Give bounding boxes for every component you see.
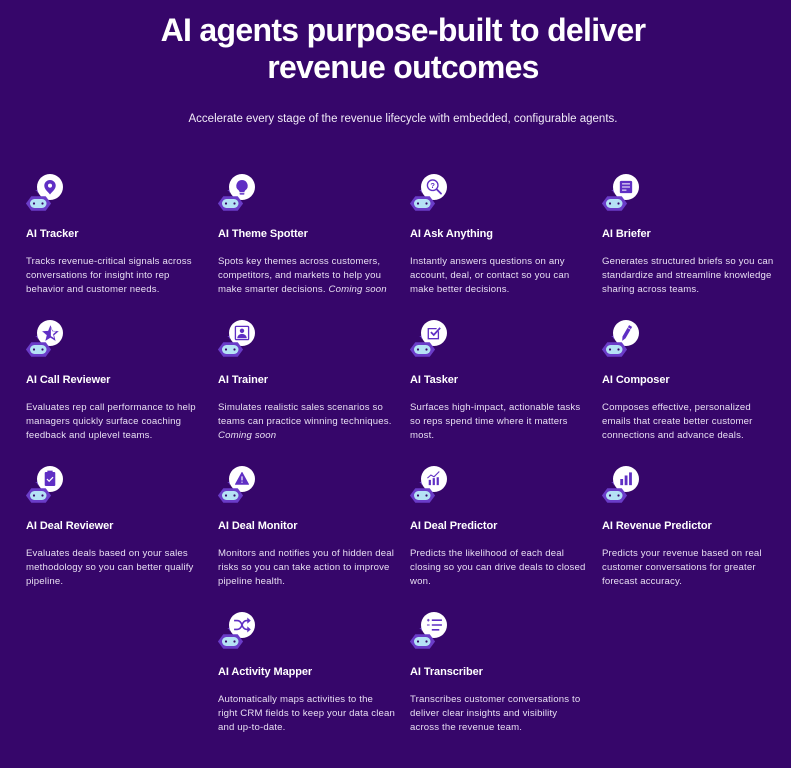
description: Instantly answers questions on any — [410, 256, 565, 267]
icon: profile card — [218, 320, 255, 357]
description: sharing across teams. — [602, 284, 699, 295]
heading: AI Trainer — [218, 374, 268, 386]
description: teams can practice winning techniques. — [218, 416, 392, 427]
description: account, deal, or contact so you can — [410, 270, 569, 281]
card: AI Deal Predictor — [410, 466, 585, 587]
card: AI Tracker — [26, 174, 192, 295]
description — [218, 694, 395, 733]
heading: AI Composer — [602, 374, 670, 386]
card: AI Call Reviewer — [26, 320, 196, 441]
description: risks so you can take action to improve — [218, 562, 390, 573]
heading: AI Deal Predictor — [410, 520, 497, 532]
description: Composes effective, personalized — [602, 402, 751, 413]
description: make smarter decisions. Coming soon — [218, 284, 387, 295]
description: competitors, and markets to help you — [218, 270, 381, 281]
description — [26, 402, 196, 441]
description: standardize and streamline knowledge — [602, 270, 772, 281]
description: pipeline health. — [218, 576, 285, 587]
title: revenue outcomes — [267, 49, 539, 85]
description: Generates structured briefs so you can — [602, 256, 773, 267]
description: deliver clear insights and visibility — [410, 708, 557, 719]
card: AI Tasker — [410, 320, 580, 441]
description: Tracks revenue-critical signals across — [26, 256, 192, 267]
description: conversations for insight into rep — [26, 270, 170, 281]
icon: light bulb — [218, 174, 255, 211]
icon: checkbox — [410, 320, 447, 357]
heading: AI Tracker — [26, 228, 78, 240]
description: Predicts the likelihood of each deal — [410, 548, 564, 559]
icon: brief document — [602, 174, 639, 211]
description: Surfaces high-impact, actionable tasks — [410, 402, 580, 413]
heading: AI Theme Spotter — [218, 228, 308, 240]
heading: AI Call Reviewer — [26, 374, 110, 386]
description: won. — [410, 576, 431, 587]
description: across the revenue team. — [410, 722, 522, 733]
card: AI Ask Anything — [410, 174, 569, 295]
title — [161, 12, 646, 85]
heading: AI Activity Mapper — [218, 666, 312, 678]
description: forecast accuracy. — [602, 576, 682, 587]
description: emails that create better customer — [602, 416, 752, 427]
icon: bar chart — [602, 466, 639, 503]
icon: clipboard check — [26, 466, 63, 503]
description: Simulates realistic sales scenarios so — [218, 402, 383, 413]
description: customer conversations for greater — [602, 562, 756, 573]
description: methodology so you can better qualify — [26, 562, 194, 573]
description: closing so you can drive deals to closed — [410, 562, 585, 573]
description: managers quickly surface coaching — [26, 416, 181, 427]
description: and up-to-date. — [218, 722, 285, 733]
description — [602, 548, 762, 587]
icon: star — [26, 320, 63, 357]
description: make better decisions. — [410, 284, 510, 295]
description: Spots key themes across customers, — [218, 256, 380, 267]
description — [218, 256, 387, 295]
description — [410, 256, 569, 295]
description — [410, 402, 580, 441]
card: AI Revenue Predictor — [602, 466, 762, 587]
description — [602, 256, 773, 295]
icon: warning triangle — [218, 466, 255, 503]
icon: bar chart with trend — [410, 466, 447, 503]
card: AI Briefer — [602, 174, 773, 295]
heading: AI Tasker — [410, 374, 458, 386]
card: AI Transcriber — [410, 604, 596, 734]
description: pipeline. — [26, 576, 63, 587]
icon: shuffle arrows — [218, 612, 255, 649]
heading: AI Deal Reviewer — [26, 520, 113, 532]
card: AI Deal Reviewer — [26, 466, 194, 587]
description: Evaluates rep call performance to help — [26, 402, 196, 413]
card: AI Composer — [602, 320, 752, 441]
description: Automatically maps activities to the — [218, 694, 373, 705]
card: AI Activity Mapper — [218, 612, 395, 733]
subtitle: Accelerate every stage of the revenue lifecycle with embedded, configurable agents. — [189, 113, 617, 125]
icon: magnifier question: ? — [430, 181, 435, 190]
heading: AI Deal Monitor — [218, 520, 297, 532]
description: Monitors and notifies you of hidden deal — [218, 548, 394, 559]
description: so reps spend time where it matters — [410, 416, 568, 427]
heading: AI Briefer — [602, 228, 651, 240]
description: Predicts your revenue based on real — [602, 548, 762, 559]
card: AI Deal Monitor — [218, 466, 394, 587]
description: Evaluates deals based on your sales — [26, 548, 188, 559]
description: feedback and uplevel teams. — [26, 430, 152, 441]
description — [218, 548, 394, 587]
description — [26, 256, 192, 295]
description: Transcribes customer conversations to — [410, 694, 580, 705]
description: behavior and customer needs. — [26, 284, 160, 295]
description — [602, 402, 752, 441]
icon: transcript lines — [402, 608, 462, 658]
description — [218, 402, 392, 441]
heading: AI Transcriber — [410, 666, 483, 678]
description — [26, 548, 194, 587]
icon: pencil — [602, 320, 639, 357]
description: most. — [410, 430, 434, 441]
description: connections and advance deals. — [602, 430, 744, 441]
heading: AI Revenue Predictor — [602, 520, 712, 532]
description — [410, 693, 580, 735]
description: right CRM fields to keep your data clean — [218, 708, 395, 719]
card: AI Trainer — [218, 320, 392, 441]
description — [410, 548, 585, 587]
icon: location pin — [26, 174, 63, 211]
heading: AI Ask Anything — [410, 228, 493, 240]
icon: magnifier question — [410, 174, 447, 211]
card: AI Theme Spotter — [218, 174, 387, 295]
title: AI agents purpose-built to deliver — [161, 12, 645, 48]
description: Coming soon — [218, 430, 276, 441]
